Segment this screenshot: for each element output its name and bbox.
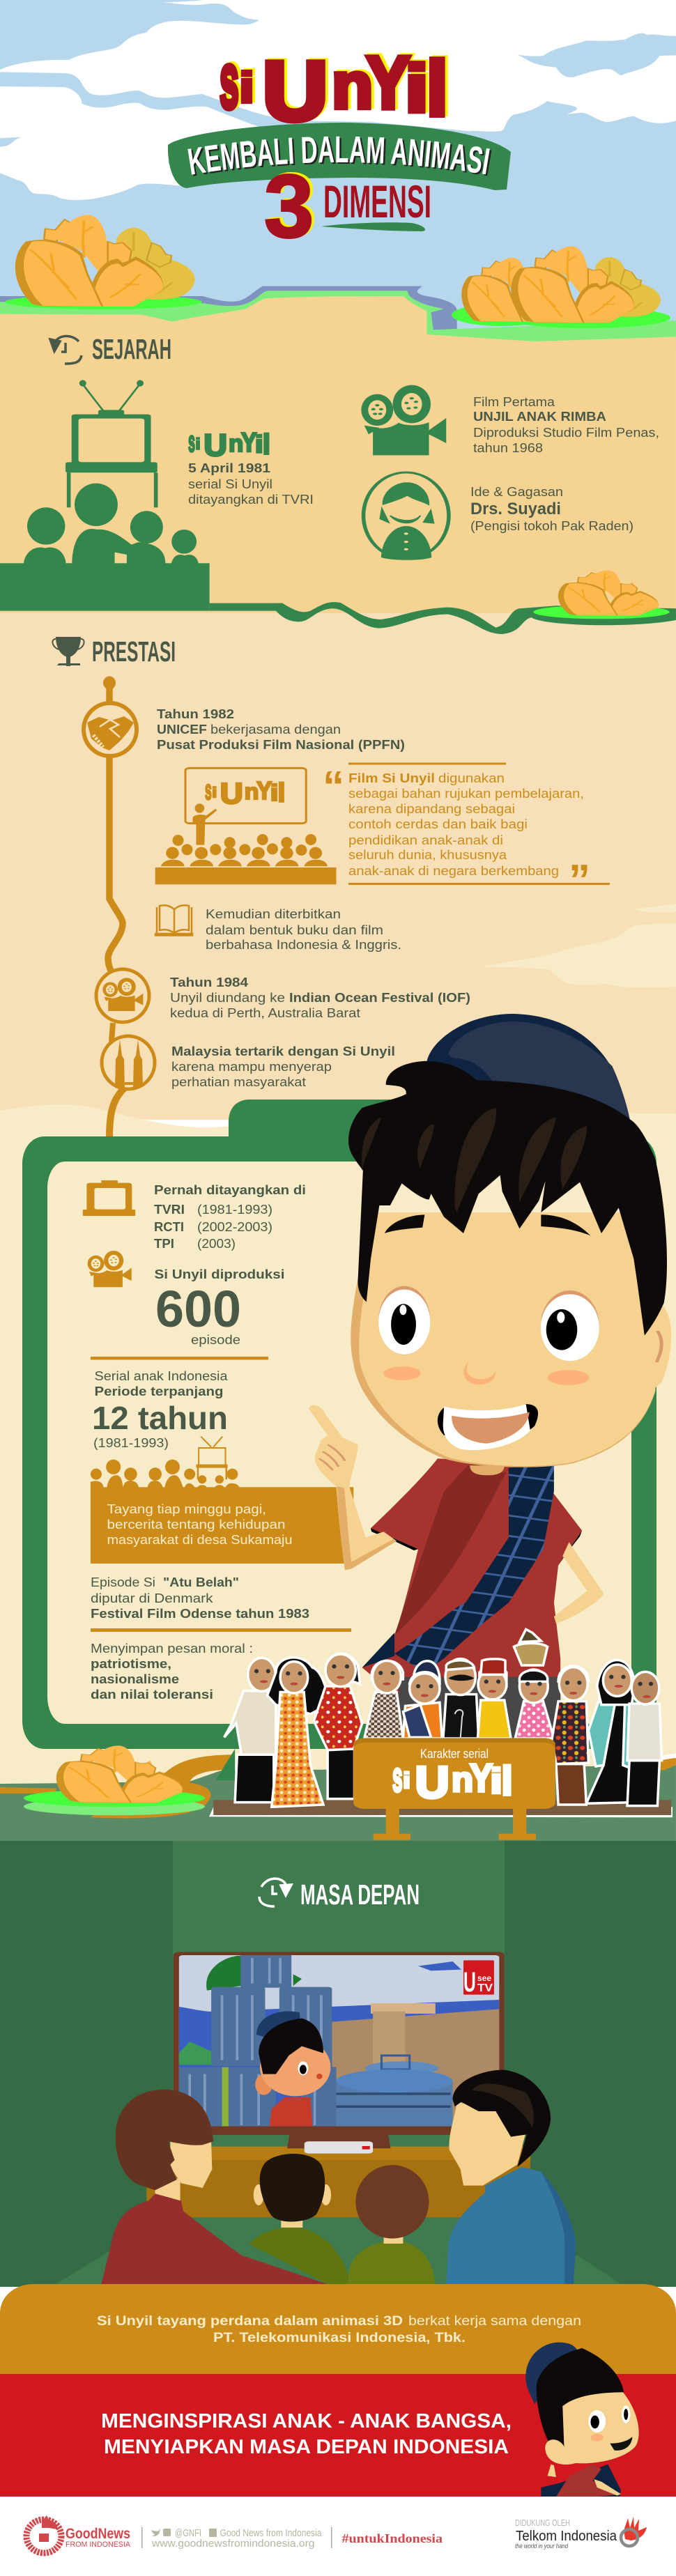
callout: quote film si unyil: ”: [569, 856, 590, 904]
callout: quote film si unyil: [323, 762, 610, 904]
logo: Si Unyil: i: [408, 50, 431, 125]
logo: si unyil gold: s: [205, 776, 212, 805]
milestone: 1982 unicef: bekerjasama dengan: [210, 723, 341, 736]
heading: masa depan: [259, 1879, 420, 1911]
logo: si unyil gold: [205, 776, 285, 810]
text: ide dan gagasan: (Pengisi tokoh Pak Raden): [470, 519, 633, 533]
puppet: mustache: [443, 1659, 479, 1738]
land strip: [0, 286, 676, 613]
set-top box: [305, 2141, 373, 2154]
banner: kembali dalam animasi: KEMBALI DALAM ANIMASI: [187, 137, 490, 175]
panel: red closing banner: [0, 2374, 676, 2497]
heading: prestasi: [52, 635, 176, 668]
logo: si unyil white: l: [502, 1759, 513, 1804]
logo: goodnews: FROM INDONESIA: [66, 2540, 131, 2549]
child boy: [249, 2154, 349, 2284]
icon: camera small: [88, 1251, 132, 1287]
panel: masa depan background: [0, 1841, 676, 2287]
milestone: book: berbahasa Indonesia & Inggris.: [206, 938, 401, 952]
panel: gold announcement: berkat kerja sama dengan: [408, 2314, 581, 2329]
text: facts card content: Serial anak Indonesia: [95, 1369, 229, 1383]
logo: Si Unyil: s: [220, 37, 239, 125]
text: usee tv: [463, 1967, 493, 1998]
milestone: 1982 unicef: UNICEF: [157, 723, 207, 736]
logo: si unyil gold: n: [245, 780, 259, 805]
heading: prestasi: PRESTASI: [92, 635, 176, 668]
icon: film camera: [361, 385, 446, 455]
milestone: 1984: Tahun 1984: [170, 975, 248, 989]
panel: sky header: [0, 0, 676, 334]
text: facts card content: (1981-1993): [93, 1436, 169, 1450]
milestone: book: Kemudian diterbitkan: [206, 907, 341, 921]
callout: quote film si unyil: digunakan: [438, 771, 505, 785]
icon: family gold: [91, 1437, 353, 1564]
text: usee tv: U: [463, 1967, 476, 1998]
text: facts card content: (2002-2003): [197, 1220, 272, 1234]
milestone: 1982 unicef: [84, 703, 405, 756]
text: ide dan gagasan: Ide & Gagasan: [470, 485, 563, 499]
cabinet: [146, 2147, 530, 2217]
icon: clock rewind: [50, 336, 82, 364]
mother: [101, 2090, 328, 2284]
logo: si unyil white: U: [415, 1757, 450, 1807]
logo: si unyil green: U: [203, 428, 227, 463]
logo: Si Unyil: n: [335, 48, 376, 121]
social links: Good News from Indonesia: [220, 2527, 322, 2539]
logo: si unyil green: i: [255, 431, 263, 458]
logo: si unyil white: s: [392, 1753, 403, 1800]
illustration: classroom: [155, 768, 337, 884]
logo: si unyil green: s: [188, 425, 195, 458]
text: ide dan gagasan: Drs. Suyadi: [470, 500, 561, 518]
text: film pertama: tahun 1968: [473, 441, 543, 455]
callout: quote film si unyil: pendidikan anak-anak di: [348, 833, 503, 847]
character: si unyil boy: [348, 1014, 671, 1737]
puppets: karakter serial si unyil: [209, 1629, 676, 1840]
milestone: 1984: [96, 969, 470, 1022]
logo: goodnews: [26, 2515, 131, 2553]
logo: Si Unyil: U: [263, 45, 328, 138]
text: facts card content: TPI: [154, 1237, 174, 1251]
text: facts card content: "Atu Belah": [163, 1575, 239, 1589]
puppet: basket pink: [514, 1629, 554, 1738]
character: small unyil: [525, 2343, 639, 2497]
logo: si unyil green: l: [263, 429, 270, 461]
logo: si unyil green: Y: [241, 426, 256, 457]
text: facts card content: Menyimpan pesan moral :: [91, 1642, 253, 1656]
icon: book: [155, 905, 192, 935]
text: usee tv: TV: [477, 1982, 493, 1994]
social links: [141, 2527, 332, 2550]
text: karakter serial logo: [392, 1747, 513, 1807]
3 dimensi: [264, 155, 431, 256]
text: facts card content: dan nilai toleransi: [91, 1688, 213, 1702]
text: facts card content: Periode terpanjang: [95, 1385, 223, 1398]
milestone: malaysia: Malaysia tertarik dengan Si Unyil: [171, 1044, 395, 1058]
puppet: long hair teal: [586, 1660, 635, 1803]
text: facts card content: episode: [191, 1333, 240, 1347]
mouth: [438, 1404, 538, 1450]
logo: goodnews: GoodNews: [66, 2526, 130, 2542]
panel: gold announcement: [0, 2284, 676, 2375]
logo: si unyil green: i: [195, 435, 201, 453]
milestone: malaysia: karena mampu menyerap: [171, 1060, 332, 1074]
pointing arm of the boy: [309, 1405, 397, 1570]
panel: cream wave and cloud: [0, 904, 676, 1791]
milestone: 1982 unicef: Pusat Produksi Film Nasional (PPFN): [157, 738, 405, 752]
text: film pertama: [473, 395, 659, 455]
milestone: malaysia: perhatian masyarakat: [171, 1075, 306, 1089]
logo: si unyil white: i: [490, 1761, 502, 1801]
eyes: [378, 1286, 599, 1361]
neck: [470, 1465, 505, 1475]
logo: Si Unyil: i: [242, 63, 257, 111]
puppet: floral dark: [552, 1666, 588, 1805]
text: karakter serial logo: Karakter serial: [420, 1747, 489, 1761]
puppet: fez yellow: [477, 1659, 511, 1738]
illustration: family watching tv: [0, 380, 283, 611]
logo: telkom indonesia: Telkom Indonesia: [516, 2529, 617, 2544]
text: film pertama: Film Pertama: [473, 395, 555, 409]
text: si unyil 5 april 1981: [188, 425, 314, 507]
panel: sejarah background: [0, 286, 676, 1120]
milestone: book: [155, 905, 401, 952]
tv screen: [179, 1955, 499, 2127]
icon: trophy: [52, 637, 84, 666]
logo: si unyil white: [392, 1753, 513, 1807]
panel: red closing banner: MENYIAPKAN MASA DEPAN INDONESIA: [104, 2436, 509, 2458]
callout: quote film si unyil: sebagai bahan rujukan pembelajaran,: [348, 787, 584, 801]
text: facts card content: 12 tahun: [92, 1400, 228, 1436]
text: facts card content: masyarakat di desa Sukamaju: [107, 1533, 293, 1547]
father: [446, 2070, 576, 2284]
callout: quote film si unyil: anak-anak di negara berkembang: [348, 864, 559, 878]
text: facts card content: diputar di Denmark: [91, 1591, 214, 1605]
text: si unyil 5 april 1981: serial Si Unyil: [188, 477, 272, 491]
milestone: 1984: Unyil diundang ke: [170, 991, 285, 1005]
logo: Si Unyil: i: [239, 64, 254, 112]
social links: @GNFI: [175, 2527, 201, 2539]
icon: tv: [83, 1180, 135, 1216]
logo: telkom indonesia: [515, 2517, 647, 2550]
logo: Si Unyil: n: [332, 49, 373, 123]
hair: [348, 1061, 667, 1336]
logo: si unyil white: i: [403, 1768, 410, 1794]
3 dimensi: 3: [267, 155, 316, 255]
hat: [427, 1014, 630, 1122]
text: facts card content: (2003): [197, 1237, 236, 1251]
logo: telkom indonesia: the world in your hand: [515, 2543, 569, 2550]
logo: Si Unyil: U: [266, 43, 330, 137]
cheeks and nose: [384, 1361, 589, 1385]
logo: Si Unyil: l: [427, 46, 448, 132]
heading: sejarah: SEJARAH: [92, 333, 171, 365]
text: si unyil 5 april 1981: ditayangkan di TVRI: [188, 493, 314, 507]
heading: sejarah: [50, 333, 171, 365]
timeline: achievements line: [103, 676, 124, 1137]
logo: si unyil green: [188, 425, 270, 463]
logo: si unyil green: n: [229, 431, 243, 457]
text: facts card content: nasionalisme: [91, 1672, 179, 1686]
text: facts card content: 600: [155, 1280, 241, 1338]
ground wave and plate bush: [276, 570, 676, 634]
clouds: [0, 0, 676, 200]
logo: si unyil white: Y: [470, 1757, 493, 1800]
callout: quote film si unyil: contoh cerdas dan baik bagi: [348, 817, 528, 831]
logo: Si Unyil: s: [222, 36, 242, 124]
puppet: bald white: [627, 1672, 662, 1806]
logo: Si Unyil: [220, 36, 451, 138]
panel: gold announcement: Si Unyil tayang perdana dalam animasi 3D: [97, 2314, 403, 2329]
floor gold curve and plate bush: [0, 1745, 676, 1818]
social links: www.goodnewsfromindonesia.org: [151, 2538, 315, 2550]
text: facts card content: bercerita tentang kehidupan: [107, 1518, 286, 1532]
ground: green floor: [0, 1765, 676, 1842]
text: facts card content: TVRI: [154, 1203, 185, 1217]
face: [351, 1212, 671, 1467]
banner: kembali dalam animasi: KEMBALI DALAM ANIMASI: [191, 138, 492, 176]
text: facts card content: Festival Film Odense tahun 1983: [91, 1607, 309, 1621]
puppet: unyil doll: [403, 1661, 442, 1738]
callout: quote film si unyil: Film Si Unyil: [348, 771, 435, 785]
footer: [0, 2497, 676, 2576]
text: facts card content: Pernah ditayangkan di: [154, 1183, 306, 1197]
logo: telkom indonesia: DIDUKUNG OLEH: [515, 2517, 570, 2528]
puppet: check shirt: [364, 1660, 403, 1738]
milestone: book: dalam bentuk buku dan film: [206, 923, 383, 937]
panel: facts card: [22, 1100, 656, 1749]
callout: quote film si unyil: “: [323, 763, 344, 811]
logo: si unyil gold: Y: [256, 778, 272, 805]
icon: portrait drs suyadi: [363, 472, 449, 560]
bush: left on sky: [4, 215, 203, 313]
panel: gold announcement: PT. Telekomunikasi Indonesia, Tbk.: [213, 2331, 466, 2345]
text: film pertama: Diproduksi Studio Film Penas,: [473, 426, 659, 440]
logo: Si Unyil: i: [405, 52, 429, 126]
sign board: [353, 1738, 555, 1840]
logo: si unyil gold: i: [212, 785, 217, 801]
logo: si unyil gold: U: [220, 778, 243, 810]
3 dimensi: DIMENSI: [323, 176, 431, 227]
callout: quote film si unyil: karena dipandang sebagai: [348, 802, 515, 816]
logo: si unyil white: n: [452, 1759, 473, 1799]
text: si unyil 5 april 1981: 5 April 1981: [188, 461, 270, 475]
illustration: family watching tv: [101, 1952, 576, 2284]
icon: twin towers: [102, 1036, 155, 1089]
text: ide dan gagasan: [470, 485, 633, 533]
logo: usee tv: [463, 1960, 494, 1995]
tv frame: [174, 1952, 505, 2148]
right arm: [554, 1542, 604, 1624]
text: facts card content: Si Unyil diproduksi: [155, 1267, 284, 1281]
logo: Si Unyil: Y: [367, 42, 410, 124]
text: facts card content: [83, 1180, 353, 1702]
logo: Si Unyil: l: [429, 45, 451, 130]
milestone: 1984: Indian Ocean Festival (IOF): [289, 991, 470, 1005]
puppet: red shirt: [314, 1653, 362, 1799]
icon: camera circle: [96, 969, 149, 1022]
puppet: bald ivory shirt: [224, 1658, 276, 1803]
heading: masa depan: MASA DEPAN: [300, 1879, 420, 1911]
puppet: girl orange dress: [268, 1658, 328, 1807]
milestone: 1982 unicef: Tahun 1982: [157, 707, 234, 721]
text: facts card content: Episode Si: [91, 1575, 155, 1589]
boy in screen: [255, 2011, 330, 2127]
logo: Si Unyil: Y: [369, 40, 413, 123]
text: film pertama: UNJIL ANAK RIMBA: [473, 410, 606, 424]
shirt and scarf: [362, 1458, 582, 1737]
child girl: [348, 2165, 436, 2284]
callout: quote film si unyil: seluruh dunia, khususnya: [348, 848, 507, 862]
logo: si unyil gold: i: [270, 780, 279, 806]
logo: si unyil gold: l: [278, 778, 285, 808]
text: facts card content: Tayang tiap minggu pagi,: [107, 1502, 266, 1516]
hashtag: #untukIndonesia: [341, 2531, 443, 2545]
icon: clock forward: [259, 1879, 291, 1906]
text: facts card content: RCTI: [154, 1220, 184, 1234]
bush: right on sky: [452, 246, 670, 328]
icon: handshake: [84, 703, 137, 756]
milestone: malaysia: [102, 1036, 395, 1089]
3 dimensi: 3: [264, 157, 314, 256]
text: facts card content: (1981-1993): [197, 1203, 272, 1217]
title: [167, 36, 511, 256]
text: usee tv: see: [477, 1973, 491, 1983]
text: facts card content: patriotisme,: [91, 1657, 171, 1671]
panel: red closing banner: MENGINSPIRASI ANAK - ANAK BANGSA,: [101, 2410, 512, 2432]
milestone: 1984: kedua di Perth, Australia Barat: [170, 1006, 360, 1020]
